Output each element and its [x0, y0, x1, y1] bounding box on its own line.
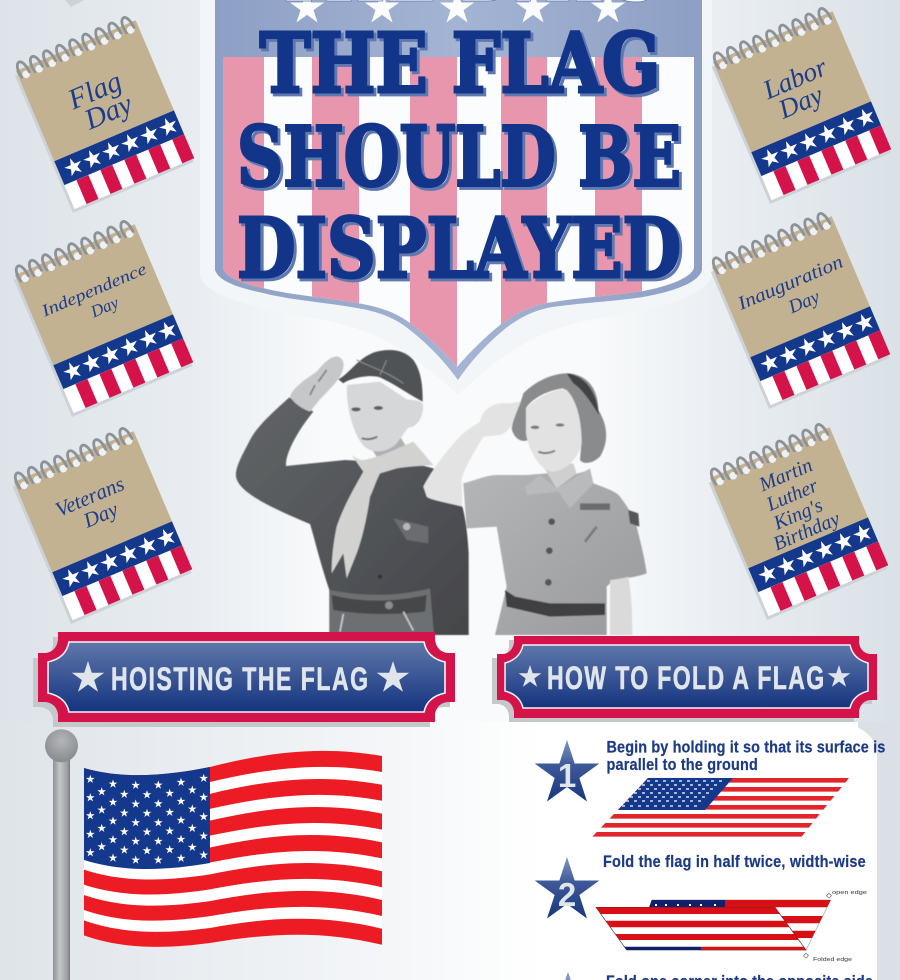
shield stars	[290, 0, 625, 23]
title line: THE FLAG: THE FLAG	[262, 18, 663, 114]
photo: saluting scouts	[236, 350, 647, 635]
calendar: Inauguration Day: Day	[785, 286, 823, 319]
calendar: Martin Luther King's Birthday: Martin	[755, 454, 816, 496]
title line: THE FLAG: THE FLAG	[260, 16, 660, 112]
calendar: Martin Luther King's Birthday: Luther	[762, 475, 821, 516]
shield with title	[215, 0, 702, 380]
calendar: Veterans Day: Day	[79, 497, 122, 533]
flag canton	[84, 767, 210, 869]
banner stars	[519, 665, 850, 687]
calendar: Labor Day: Labor	[758, 51, 832, 105]
step 2	[535, 853, 867, 963]
boy scout	[236, 350, 469, 635]
calendar: Inauguration Day: Inauguration	[734, 252, 846, 315]
step 3 star	[565, 972, 571, 980]
banner: hoisting the flag	[33, 632, 455, 727]
flagpole	[45, 729, 78, 980]
step 2 folded flag illustration	[596, 900, 831, 950]
label: folded edge: Folded edge	[813, 957, 852, 963]
calendar: Martin Luther King's Birthday: Birthday	[770, 508, 843, 555]
step 1 flag illustration	[592, 778, 849, 837]
step 2 star: 2	[558, 876, 576, 913]
girl scout	[423, 373, 647, 635]
calendar: Labor Day: Day	[773, 79, 827, 125]
calendar: Labor Day	[708, 5, 892, 204]
title line: DISPLAYED: DISPLAYED	[237, 201, 681, 297]
calendar: Independence Day: Independence	[38, 259, 150, 321]
shield glow	[200, 0, 712, 395]
step 3	[565, 972, 873, 980]
shield stripes	[223, 57, 694, 377]
calendar: Independence Day: Day	[87, 293, 122, 322]
calendar: Martin Luther King's Birthday	[705, 421, 889, 620]
step 1 star	[535, 740, 599, 802]
calendar: Veterans Day: Veterans	[52, 471, 128, 522]
banner stars	[72, 661, 409, 692]
flag stars	[86, 774, 208, 864]
step 2 text: Fold the flag in half twice, width-wise	[603, 853, 866, 871]
step 1 text	[606, 739, 886, 774]
step 1	[535, 739, 886, 837]
step 2 star	[535, 857, 599, 919]
label: open edge	[827, 890, 867, 898]
label: folded edge	[804, 953, 852, 963]
calendar: Veterans Day	[9, 425, 193, 624]
step 1 text: parallel to the ground	[606, 756, 758, 774]
calendar shadow fragment	[65, 0, 84, 7]
calendar: Flag Day: Day	[79, 88, 137, 137]
banner heading: HOISTING THE FLAG	[111, 661, 368, 697]
title line: SHOULD BE: SHOULD BE	[240, 112, 684, 208]
label: open edge: open edge	[832, 890, 867, 896]
title line: SHOULD BE: SHOULD BE	[237, 110, 681, 206]
calendar: Martin Luther King's Birthday: King's	[770, 494, 826, 535]
banner: how to fold a flag	[492, 636, 877, 722]
calendar: Flag Day: Flag	[63, 65, 126, 117]
calendar: Flag Day	[11, 14, 195, 213]
step 1 text: Begin by holding it so that its surface is	[606, 739, 886, 757]
shield body	[215, 0, 702, 380]
calendar: Independence Day	[10, 218, 194, 417]
step 1 star: 1	[558, 757, 576, 794]
title line: DISPLAYED: DISPLAYED	[240, 204, 684, 300]
waving American flag	[84, 751, 382, 963]
calendar: Inauguration Day	[707, 210, 891, 409]
banner heading: HOW TO FOLD A FLAG	[547, 660, 824, 696]
